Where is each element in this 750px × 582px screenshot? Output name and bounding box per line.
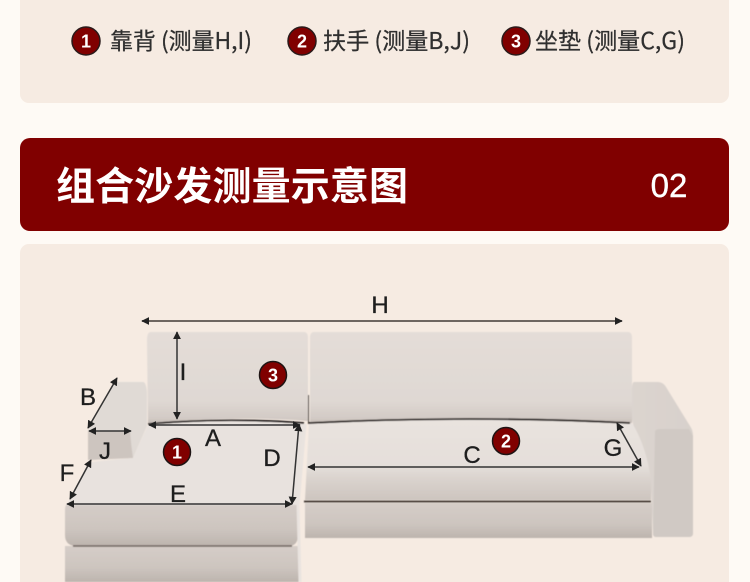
- section number: 02: [651, 167, 687, 204]
- measurement arrows: [67, 321, 641, 504]
- measurement labels: D: [263, 445, 281, 472]
- right seat cushion: [305, 418, 651, 500]
- backrest left: [147, 332, 308, 424]
- legend item 3: seat cushion: 坐垫 (测量C,G): [535, 22, 685, 56]
- legend item 2: armrest: 扶手 (测量B,J): [323, 22, 470, 56]
- legend item 2: armrest: 2: [297, 32, 307, 52]
- badge 2 on seat cushion: 2: [501, 432, 511, 452]
- badge 2 on seat cushion: [492, 428, 520, 454]
- measurement labels: A: [205, 425, 221, 452]
- badge 1 on chaise seat: [164, 438, 190, 466]
- measurement labels: C: [463, 442, 481, 469]
- panel: sofa diagram: [20, 244, 729, 582]
- heading: 组合沙发测量示意图: [56, 166, 408, 209]
- legend item 3: seat cushion: 3: [511, 32, 521, 52]
- right arm: [632, 382, 693, 537]
- measurement labels: E: [170, 481, 186, 508]
- chaise base: [65, 546, 300, 582]
- measurement labels: H: [371, 292, 389, 319]
- badge 3 on backrest: 3: [268, 366, 278, 386]
- badge 3 on backrest: [260, 362, 286, 388]
- legend item 1: backrest: 1: [81, 32, 91, 52]
- left arm: [88, 382, 147, 460]
- measurement labels: G: [604, 435, 622, 462]
- right base: [305, 503, 652, 538]
- measurement labels: I: [180, 359, 186, 386]
- measurement labels: J: [99, 438, 111, 465]
- sofa illustration: [65, 332, 693, 582]
- backrest right: [310, 332, 632, 424]
- chaise seat top: [67, 420, 304, 505]
- measurement labels: F: [60, 460, 74, 487]
- divider between backrests: [308, 395, 310, 424]
- measurement labels: [60, 292, 622, 508]
- badge 1 on chaise seat: 1: [172, 442, 182, 462]
- legend item 1: backrest: 靠背 (测量H,I): [110, 22, 252, 56]
- section header bar: [20, 138, 729, 231]
- top panel: legend: [20, 0, 729, 103]
- chaise front cushion: [65, 503, 298, 546]
- measurement labels: B: [80, 384, 96, 411]
